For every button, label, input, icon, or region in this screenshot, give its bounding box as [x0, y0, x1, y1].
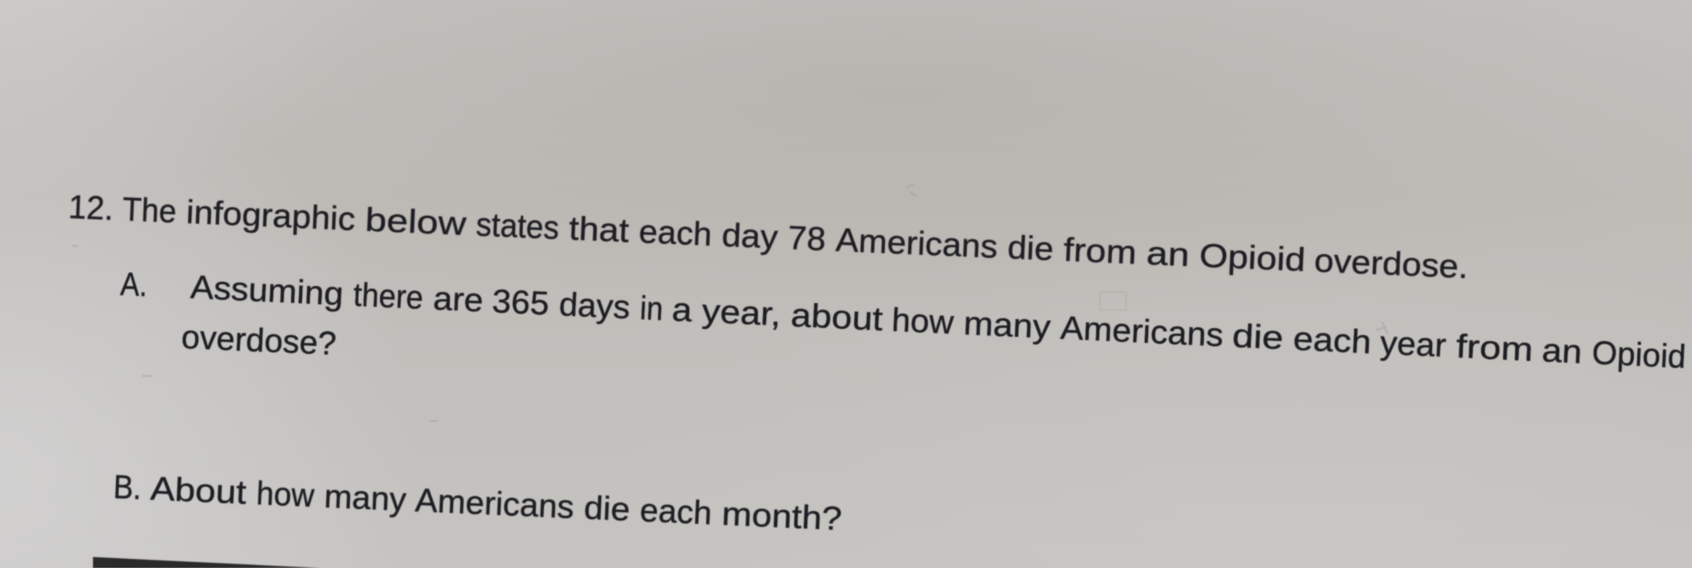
part B question: each: [639, 491, 713, 531]
part A question: about: [790, 296, 884, 337]
part B question: [113, 468, 843, 537]
paper marks: [72, 184, 1388, 421]
part A question: 365: [491, 282, 550, 322]
question 12 text: Opioid: [1199, 237, 1306, 278]
part A question: each: [1292, 320, 1372, 360]
part B question: B.: [113, 468, 142, 506]
question 12 text: from: [1063, 231, 1137, 271]
part A question: days: [558, 285, 631, 326]
part B question: Americans: [414, 481, 575, 525]
part A question: an: [1541, 331, 1583, 370]
infographic top edge: [93, 557, 320, 568]
part A question: there: [352, 276, 424, 316]
question 12 text: infographic: [186, 193, 356, 237]
question 12 text: 78: [787, 219, 827, 258]
part B question: how: [256, 474, 315, 514]
question 12 text: die: [1007, 228, 1054, 267]
question 12 text: each: [638, 213, 713, 253]
part A question: how: [891, 301, 955, 341]
part A question: [181, 268, 1687, 375]
question 12 text: that: [568, 210, 630, 249]
part B question: About: [150, 470, 247, 511]
question 12 text: [68, 188, 1469, 285]
part A question: Opioid: [1591, 334, 1687, 375]
part A label: A.: [120, 265, 148, 303]
question 12 text: an: [1146, 234, 1190, 273]
question 12 text: day: [721, 216, 779, 255]
part A question: year: [1379, 324, 1447, 364]
part A question: are: [432, 279, 484, 319]
part A question: overdose?: [181, 318, 337, 362]
part A question: in: [639, 289, 664, 327]
part A question: year,: [701, 292, 782, 333]
question 12 text: overdose.: [1314, 242, 1469, 285]
question 12 text: below: [364, 201, 467, 242]
question 12 text: The: [122, 190, 177, 230]
part A question: from: [1455, 327, 1534, 368]
part B question: many: [323, 477, 408, 518]
part A question: Assuming: [190, 268, 344, 312]
part A question: many: [963, 304, 1052, 345]
question 12 text: 12.: [68, 188, 114, 227]
part B question: month?: [721, 495, 843, 537]
part A question: Americans: [1060, 309, 1224, 353]
part B question: die: [583, 489, 631, 528]
question 12 text: Americans: [835, 221, 998, 265]
part A question: a: [671, 291, 694, 328]
part A question: die: [1232, 317, 1284, 356]
question 12 text: states: [475, 206, 560, 246]
